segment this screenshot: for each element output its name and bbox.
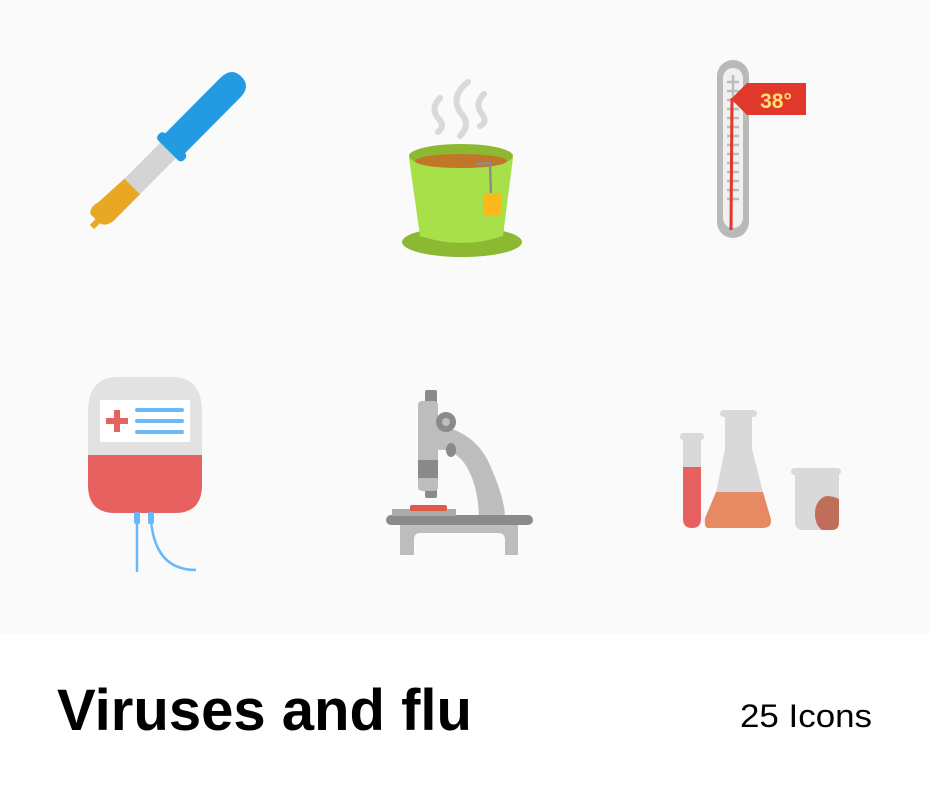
title: Viruses and flu	[57, 678, 472, 743]
subtitle: icon count: 25 Icons	[740, 698, 872, 734]
icon: thermometer: 38°	[760, 90, 792, 113]
icon: microscope	[386, 390, 533, 555]
flag label 38°	[731, 83, 806, 115]
icon: thermometer	[717, 60, 806, 238]
icon: dropper	[79, 64, 254, 240]
icon: IV bag	[88, 377, 202, 572]
icon: lab flasks	[680, 410, 841, 530]
steam	[434, 82, 485, 136]
icon: tea cup	[402, 82, 522, 257]
